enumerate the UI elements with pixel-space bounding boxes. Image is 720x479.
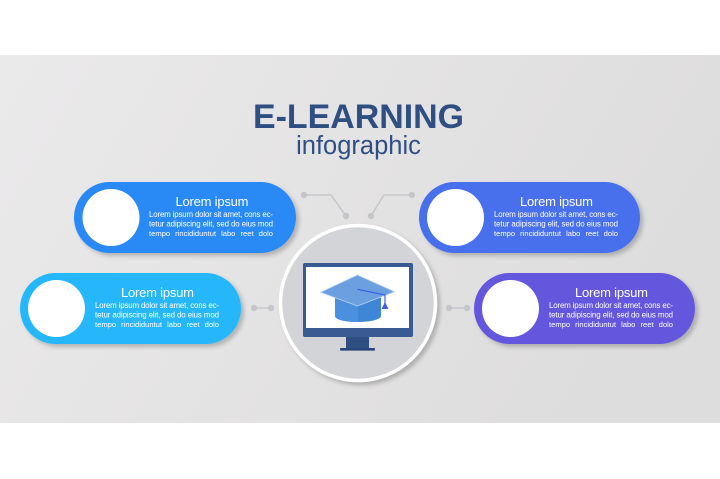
text block: top right	[494, 210, 618, 238]
central circle	[280, 226, 436, 380]
text block: bottom right	[549, 301, 673, 329]
graduation cap	[320, 275, 394, 322]
text block: bottom right: tetur adipiscing elit, sed do eius mod	[549, 310, 673, 320]
background panel	[0, 55, 720, 423]
text block: top right: tempo rincididuntut labo reet dolo	[494, 229, 618, 238]
connector: upper right	[368, 192, 415, 219]
heading: bottom right: Lorem ipsum	[575, 285, 648, 300]
text block: top left	[149, 210, 273, 238]
text block: bottom left: tetur adipiscing elit, sed do eius mod	[95, 310, 219, 320]
icon placeholder: top right	[427, 189, 484, 246]
panel: top right pill	[419, 182, 640, 253]
panel: bottom right pill	[474, 273, 695, 344]
monitor stand	[340, 336, 375, 351]
text block: bottom left	[95, 301, 219, 329]
text block: bottom left: tempo rincididuntut labo reet dolo	[95, 320, 219, 329]
text block: top left: tempo rincididuntut labo reet dolo	[149, 229, 273, 238]
monitor body	[303, 263, 413, 337]
text block: top right: tetur adipiscing elit, sed do eius mod	[494, 220, 618, 228]
text block: top right: Lorem ipsum dolor sit amet, cons ec-	[494, 210, 618, 219]
subtitle: infographic	[296, 132, 421, 160]
heading: bottom left: Lorem ipsum	[121, 285, 194, 300]
icon placeholder: top left	[82, 189, 140, 246]
text block: bottom right: Lorem ipsum dolor sit amet, cons ec-	[549, 301, 673, 310]
connector: upper left	[301, 192, 349, 219]
heading: top right: Lorem ipsum	[520, 194, 593, 209]
icon placeholder: bottom left	[28, 280, 85, 337]
text block: bottom left: Lorem ipsum dolor sit amet, cons ec-	[95, 301, 219, 310]
connector: right	[446, 305, 470, 311]
panel: top left pill	[74, 182, 296, 253]
monitor screen	[306, 267, 409, 328]
text block: top left: tetur adipiscing elit, sed do eius mod	[149, 220, 273, 228]
icon placeholder: bottom right	[482, 280, 539, 337]
heading: top left: Lorem ipsum	[176, 194, 248, 209]
icon: monitor with graduation cap	[303, 263, 413, 351]
panel: bottom left pill	[20, 273, 241, 344]
connector: left	[251, 305, 274, 311]
title: E-LEARNING	[253, 98, 464, 136]
text block: bottom right: tempo rincididuntut labo reet dolo	[549, 320, 673, 329]
text block: top left: Lorem ipsum dolor sit amet, cons ec-	[149, 210, 273, 219]
